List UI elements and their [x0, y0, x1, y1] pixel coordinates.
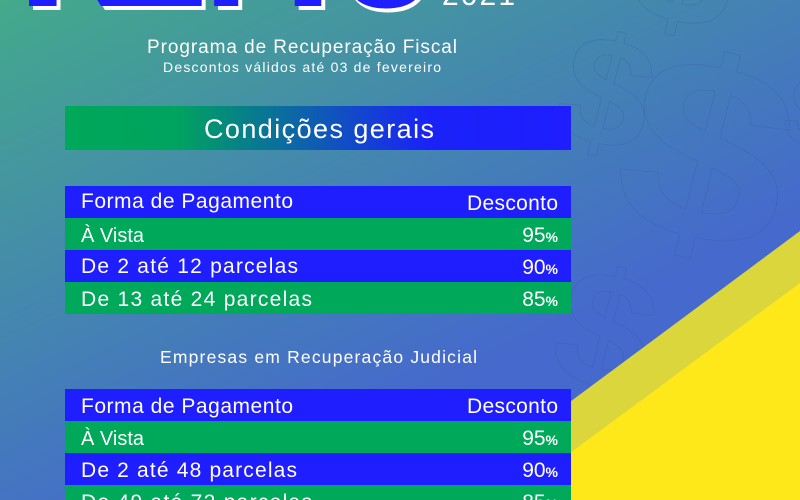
- row: 2 to 12 installments: De 2 até 12 parcelas: [81, 255, 298, 278]
- table: general conditions: [65, 186, 571, 314]
- title white shadow: [26, 0, 430, 40]
- dollar sign watermarks: $: [537, 230, 675, 432]
- table header: [65, 389, 571, 421]
- yellow diagonal band: [520, 231, 800, 500]
- row: à vista: À Vista: [81, 224, 145, 247]
- section heading: companies in judicial recovery: Empresas em Recuperação Judicial: [160, 347, 477, 367]
- row: 2 to 48 installments: 90%: [522, 459, 559, 482]
- row: 2 to 48 installments: [65, 453, 571, 485]
- row: 13 to 24 installments: De 13 até 24 parcelas: [81, 288, 312, 311]
- table header: Desconto: [467, 395, 558, 418]
- row: 2 to 12 installments: [65, 250, 571, 282]
- panel: general conditions heading: [65, 106, 571, 150]
- row: à vista: À Vista: [81, 427, 145, 450]
- row: 2 to 12 installments: 90%: [522, 256, 559, 279]
- validity note: Descontos válidos até 03 de fevereiro: [163, 59, 441, 75]
- table header: Forma de Pagamento: [81, 190, 293, 213]
- yellow corner: [520, 283, 800, 500]
- row: 13 to 24 installments: [65, 282, 571, 314]
- title blue letters: [22, 0, 428, 36]
- row: à vista: 95%: [522, 427, 559, 450]
- row: 2 to 48 installments: De 2 até 48 parcelas: [81, 459, 297, 482]
- row: à vista: [65, 218, 571, 250]
- row: à vista: [65, 421, 571, 453]
- subtitle: Programa de Recuperação Fiscal: [147, 37, 457, 58]
- table header: Forma de Pagamento: [81, 395, 293, 418]
- row: 13 to 24 installments: 85%: [522, 288, 559, 311]
- row: à vista: 95%: [522, 224, 559, 247]
- dollar sign watermarks: [537, 0, 800, 432]
- table header: [65, 186, 571, 218]
- title: REFIS: [22, 0, 430, 40]
- row: 49 to 72 installments: [65, 485, 571, 500]
- table: judicial recovery: [65, 389, 571, 500]
- panel: general conditions heading: Condições gerais: [204, 114, 434, 144]
- dollar sign watermarks: $: [542, 0, 672, 187]
- table header: Desconto: [467, 192, 558, 215]
